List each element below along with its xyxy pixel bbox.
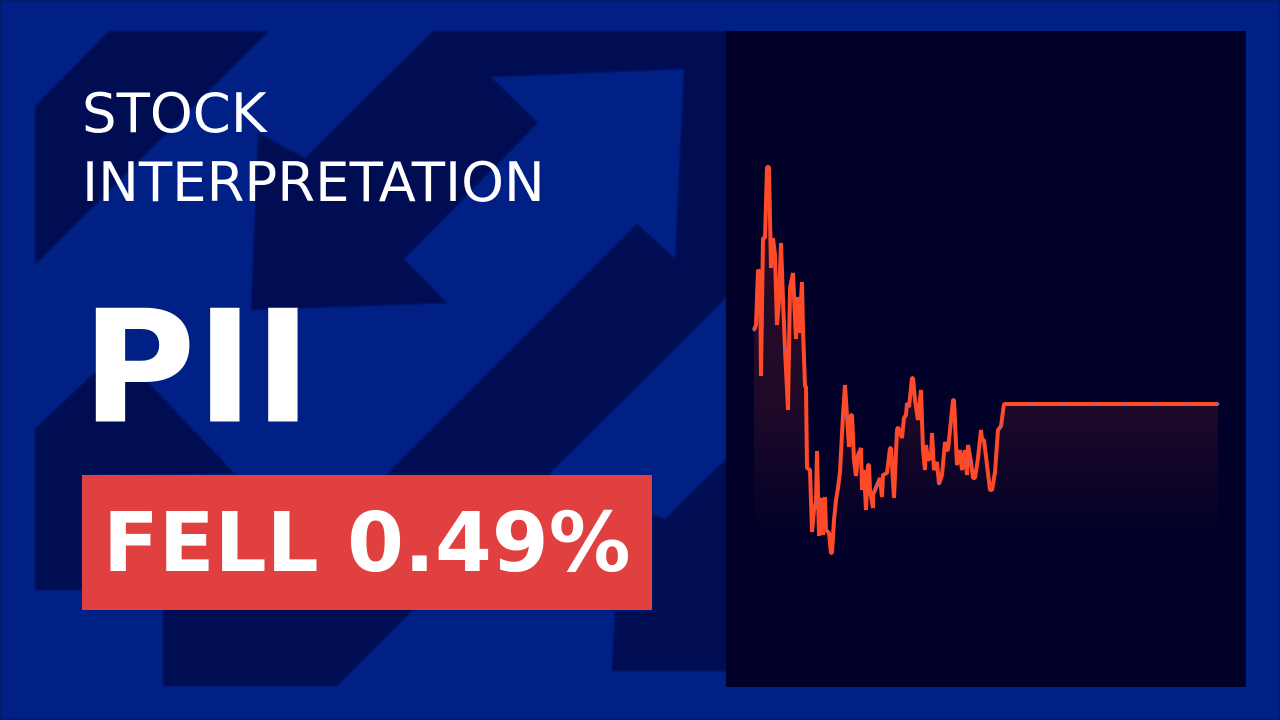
ticker: PII xyxy=(82,276,312,458)
price line xyxy=(754,167,1218,553)
change badge: FELL 0.49% xyxy=(103,496,631,591)
change badge xyxy=(82,475,652,610)
area fill xyxy=(754,167,1218,560)
data markers xyxy=(753,329,1219,503)
title: INTERPRETATION xyxy=(82,150,545,214)
background arrows xyxy=(35,31,730,686)
title xyxy=(82,81,545,214)
chart panel xyxy=(726,31,1246,687)
title: STOCK xyxy=(82,81,268,145)
